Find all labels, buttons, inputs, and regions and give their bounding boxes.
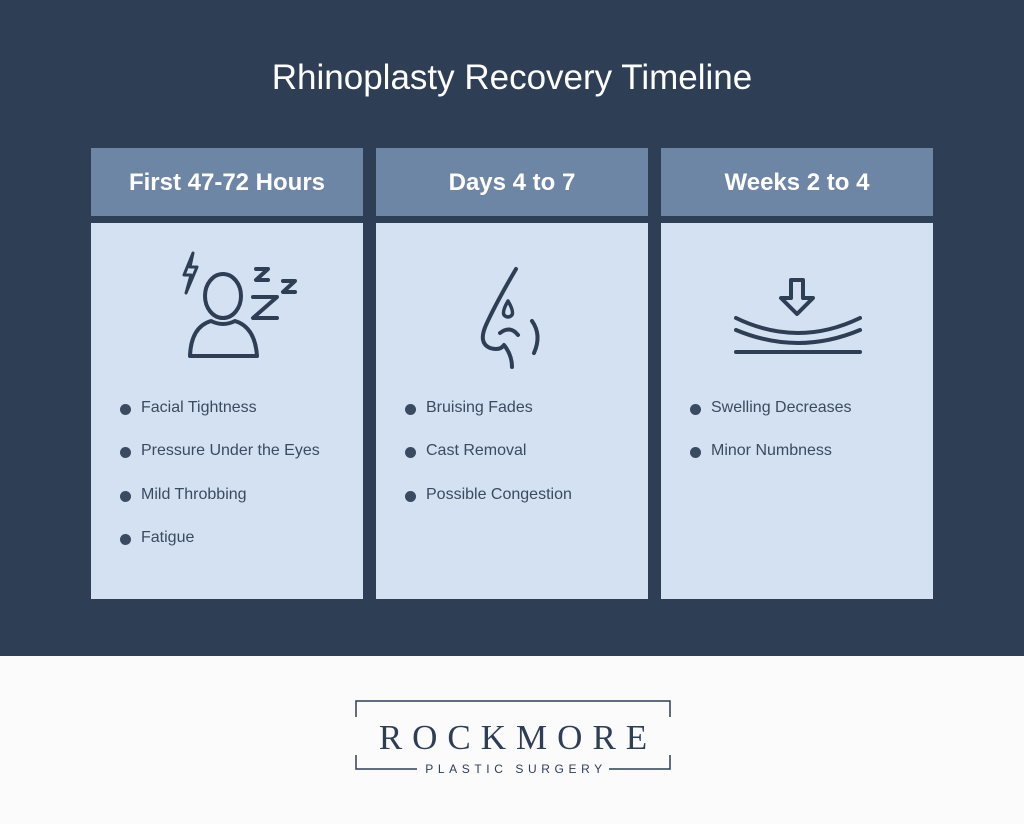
panel: days: Possible Congestion [426,486,572,503]
panel: first hours: Pressure Under the Eyes [141,442,320,459]
panel: first hours: Fatigue [141,529,194,546]
list [405,399,572,503]
title: Rhinoplasty Recovery Timeline [272,58,752,97]
logo [355,700,671,776]
header: days [376,148,648,216]
icon: tired person [182,252,297,358]
list [690,399,852,459]
header: first hours [91,148,363,216]
panel: first hours [91,223,363,599]
panel: first hours: Mild Throbbing [141,486,247,503]
list [120,399,320,546]
panel: weeks: Swelling Decreases [711,399,852,416]
panel: weeks: Minor Numbness [711,442,832,459]
logo wordmark: ROCKMORE [379,718,657,757]
panel: days: Cast Removal [426,442,526,459]
dark background panel [0,0,1024,656]
icon: nose [480,266,540,369]
icon: pressure layers [734,278,862,354]
header: weeks [661,148,933,216]
panel: days: Bruising Fades [426,399,533,416]
panel: first hours: Facial Tightness [141,399,257,416]
panel: weeks [661,223,933,599]
header: days: Days 4 to 7 [449,169,575,196]
panel: days [376,223,648,599]
logo subtitle: PLASTIC SURGERY [425,762,607,776]
header: weeks: Weeks 2 to 4 [725,169,869,196]
header: first hours: First 47-72 Hours [129,169,325,196]
